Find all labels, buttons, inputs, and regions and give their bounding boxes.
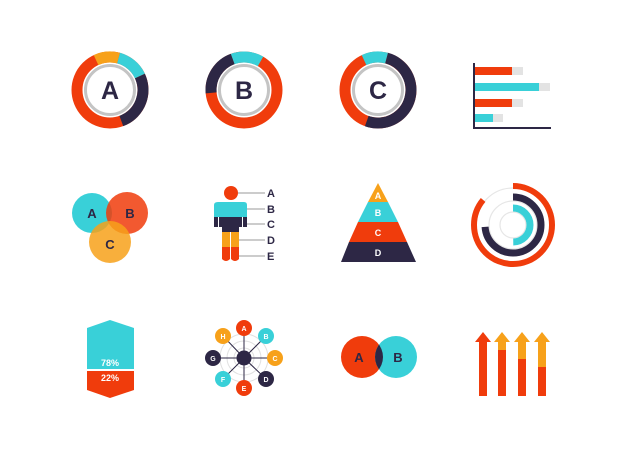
- shield percentage chart: 22%: [101, 373, 119, 383]
- three-circle venn diagram: C: [105, 237, 115, 252]
- horizontal bar chart: [473, 63, 551, 129]
- growth arrows chart: [475, 332, 550, 396]
- network hub diagram: F: [221, 377, 226, 384]
- two-circle venn diagram: [341, 336, 417, 378]
- two-circle venn diagram: B: [393, 350, 403, 365]
- two-circle venn diagram: A: [354, 350, 364, 365]
- three-circle venn diagram: A: [87, 206, 97, 221]
- pyramid chart: A: [375, 191, 382, 201]
- network hub diagram: B: [263, 334, 269, 341]
- radial progress chart: [474, 186, 552, 264]
- donut chart C: [334, 46, 422, 134]
- human body diagram: D: [267, 235, 275, 247]
- pyramid chart: C: [375, 228, 382, 238]
- human body diagram: B: [267, 204, 275, 216]
- donut chart A: [66, 46, 154, 134]
- three-circle venn diagram: B: [125, 206, 135, 221]
- human body diagram: E: [267, 251, 274, 263]
- human body diagram: C: [267, 219, 275, 231]
- shield percentage chart: [87, 320, 134, 398]
- shield percentage chart: 78%: [101, 358, 119, 368]
- network hub diagram: G: [210, 356, 216, 363]
- pyramid chart: D: [375, 248, 382, 258]
- network hub diagram: A: [241, 326, 247, 333]
- human body diagram: [214, 186, 275, 263]
- three-circle venn diagram: [72, 192, 148, 263]
- donut chart B: [202, 48, 286, 132]
- network hub diagram: H: [220, 334, 226, 341]
- network hub diagram: [205, 320, 283, 396]
- network hub diagram: D: [263, 377, 269, 384]
- human body diagram: A: [267, 188, 275, 200]
- donut chart B: B: [235, 77, 253, 105]
- pyramid chart: B: [375, 208, 382, 218]
- network hub diagram: C: [272, 356, 278, 363]
- pyramid chart: [341, 183, 416, 262]
- donut chart C: C: [369, 77, 387, 105]
- donut chart A: A: [101, 77, 119, 105]
- network hub diagram: E: [242, 386, 247, 393]
